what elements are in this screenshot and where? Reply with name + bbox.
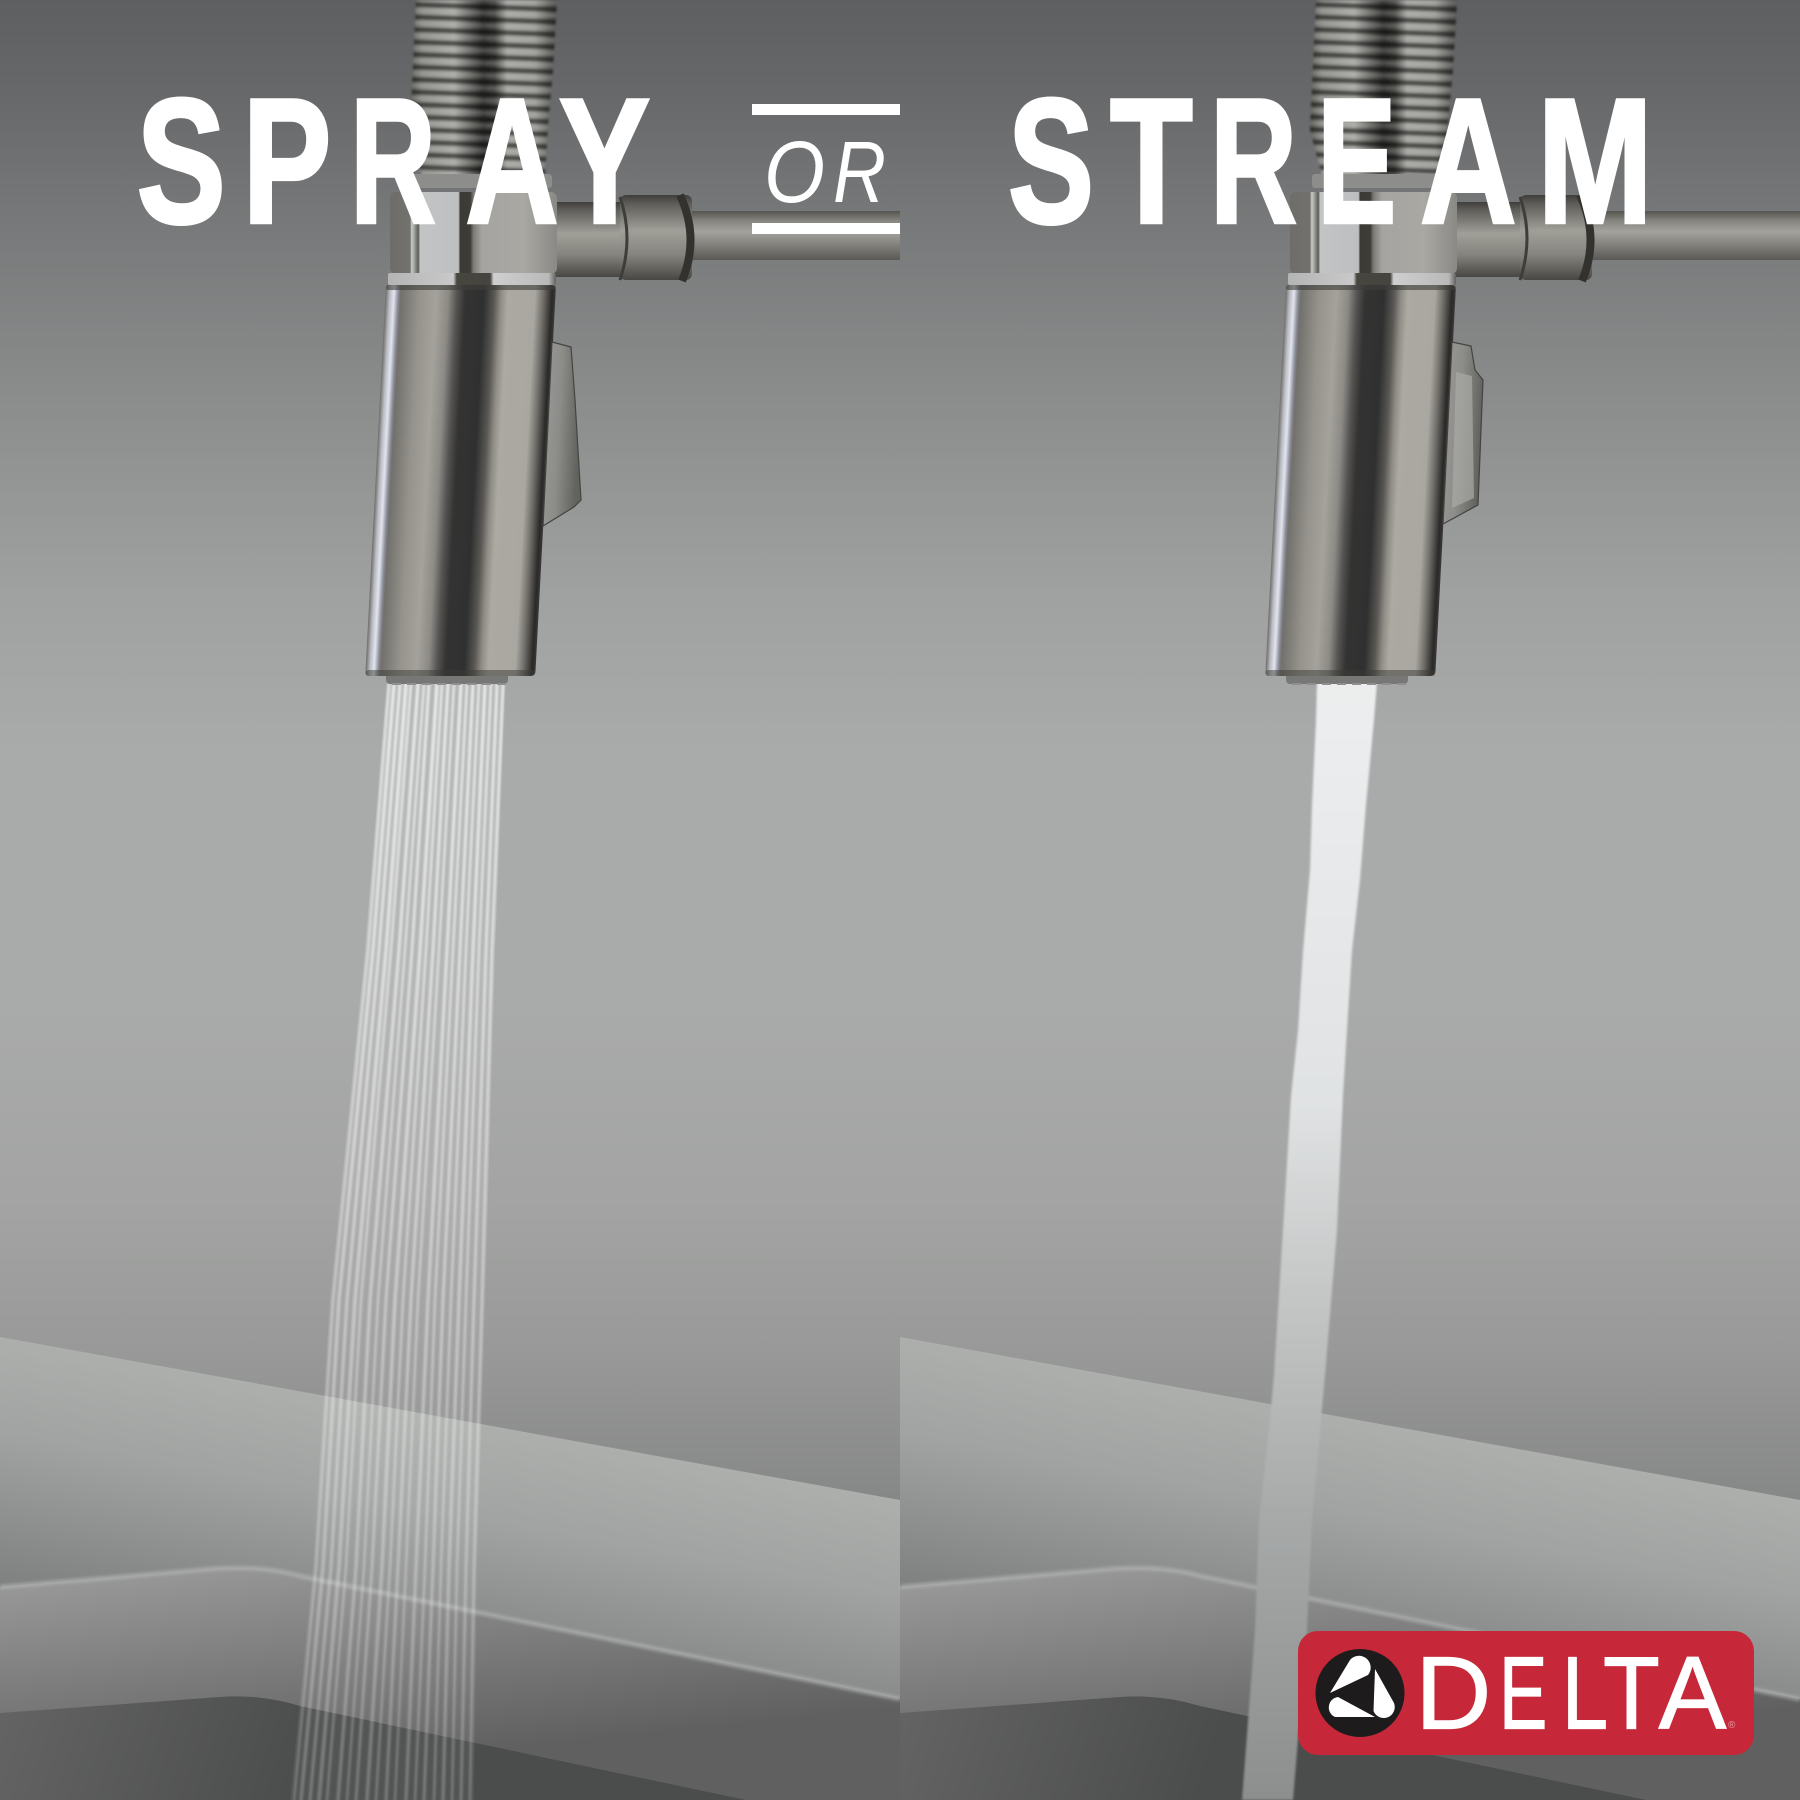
heading: STREAM: T: [1110, 62, 1193, 260]
wordmark: T: [1603, 1636, 1660, 1750]
wordmark: E: [1499, 1636, 1547, 1750]
OR divider: [752, 104, 900, 234]
wall backdrop: [0, 0, 900, 1800]
heading: SPRAY: Y: [559, 62, 650, 260]
heading: STREAM: M: [1537, 62, 1653, 260]
spray strands: [294, 684, 503, 1800]
sink rim highlight: [0, 1568, 900, 1699]
heading: STREAM: A: [1420, 62, 1516, 260]
chrome neck ring: [412, 174, 552, 188]
icon: Delta emblem: [1316, 1649, 1404, 1737]
faucet: stream head assembly: [1265, 0, 1800, 684]
red badge: [1298, 1631, 1754, 1755]
sink ledge: [0, 1337, 900, 1800]
chrome ring: [388, 273, 556, 285]
heading: SPRAY: A: [466, 62, 558, 260]
wordmark: A: [1659, 1636, 1727, 1750]
OR text: R: [833, 124, 886, 221]
faucet arm connector: [550, 195, 692, 281]
heading: SPRAY: S: [137, 62, 226, 260]
panel: spray photo background: [0, 0, 900, 1800]
top rule: [752, 104, 900, 115]
registered mark: ®: [1728, 1720, 1736, 1731]
collar: [390, 192, 557, 274]
pull-down handle body: [365, 285, 556, 676]
wordmark: D: [1415, 1636, 1491, 1750]
faucet: spray head assembly: [365, 0, 900, 684]
wordmark: L: [1562, 1636, 1608, 1750]
panel: stream photo background: [900, 0, 1800, 1800]
water: solid stream: [1242, 682, 1377, 1800]
OR text: O: [764, 124, 825, 221]
logo: Delta badge: [1298, 1631, 1754, 1755]
spray haze: [290, 682, 505, 1800]
ribbed hose: [410, 0, 557, 176]
faucet pipe arm: [692, 211, 900, 260]
water: spray pattern: [290, 682, 505, 1800]
heading: SPRAY: R: [350, 62, 436, 260]
nozzle: [386, 670, 508, 684]
heading: STREAM: S: [1008, 62, 1094, 260]
heading: STREAM: R: [1210, 62, 1297, 260]
sink basin: [0, 1696, 746, 1800]
heading: SPRAY: P: [243, 62, 331, 260]
sink front rim: [0, 1568, 900, 1800]
toggle button: stream: [1443, 342, 1483, 524]
bottom rule: [752, 223, 900, 234]
heading: STREAM: E: [1317, 62, 1396, 260]
toggle button: spray: [543, 342, 581, 526]
